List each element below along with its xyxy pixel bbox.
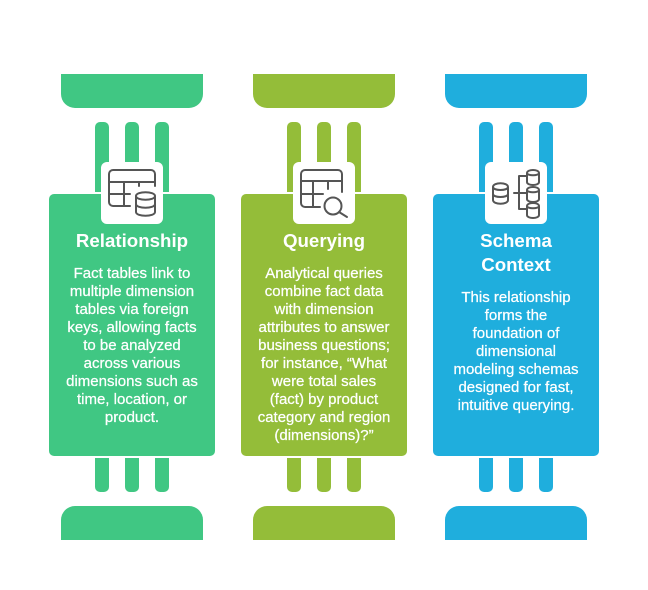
icon: table with magnifier <box>293 162 355 224</box>
icon: database schema tree <box>485 162 547 224</box>
top connector bar 1 <box>479 122 493 192</box>
top connector bar 2 <box>317 122 331 192</box>
bottom connector bar 1 <box>479 458 493 492</box>
heading: Schema Context: Schema <box>480 230 552 251</box>
panel: Relationship card <box>49 194 215 456</box>
bottom connector bar 1 <box>95 458 109 492</box>
text: Querying description: category and region <box>258 409 390 426</box>
text: Relationship description: dimensions such as <box>66 373 198 390</box>
text: Querying description: (dimensions)?” <box>274 427 374 444</box>
text: Querying description: for instance, “What <box>261 355 387 372</box>
text: Querying description: were total sales <box>272 373 376 390</box>
text: Relationship description: product. <box>105 409 159 426</box>
bottom connector bar 3 <box>347 458 361 492</box>
top connector bar 3 <box>155 122 169 192</box>
text: Schema Context description: forms the <box>485 307 547 324</box>
text: Querying description: (fact) by product <box>270 391 378 408</box>
text: Schema Context description: foundation of <box>473 325 559 342</box>
text: Schema Context description: This relationship <box>461 289 571 306</box>
text: Relationship description: time, location, or <box>77 391 187 408</box>
text: Querying description <box>258 265 390 444</box>
text: Relationship description <box>66 265 198 426</box>
top connector bar 3 <box>347 122 361 192</box>
text: Relationship description: tables via foreign <box>75 301 189 318</box>
top cap <box>253 74 395 108</box>
text: Relationship description: across various <box>84 355 180 372</box>
top cap <box>61 74 203 108</box>
heading: Schema Context: Context <box>481 254 551 275</box>
text: Relationship description: Fact tables link to <box>74 265 190 282</box>
bottom cap <box>253 506 395 540</box>
top connector bar 1 <box>95 122 109 192</box>
text: Querying description: Analytical queries <box>265 265 383 282</box>
column: Relationship <box>49 74 215 540</box>
bottom connector bar 2 <box>509 458 523 492</box>
text: Relationship description: multiple dimension <box>70 283 194 300</box>
top connector bar 3 <box>539 122 553 192</box>
bottom connector bar 1 <box>287 458 301 492</box>
heading: Relationship: Relationship <box>76 230 188 251</box>
top cap <box>445 74 587 108</box>
column: Schema Context <box>433 74 599 540</box>
text: Relationship description: keys, allowing facts <box>67 319 197 336</box>
bottom cap <box>445 506 587 540</box>
heading: Querying: Querying <box>283 230 365 251</box>
column: Querying <box>241 74 407 540</box>
bottom connector bar 2 <box>125 458 139 492</box>
text: Relationship description: to be analyzed <box>83 337 181 354</box>
top connector bar 1 <box>287 122 301 192</box>
text: Schema Context description: designed for fast, <box>458 379 574 396</box>
text: Schema Context description: dimensional <box>476 343 556 360</box>
text: Schema Context description: intuitive querying. <box>458 397 574 414</box>
bottom connector bar 2 <box>317 458 331 492</box>
panel: Querying card <box>241 194 407 456</box>
text: Querying description: attributes to answer <box>259 319 389 336</box>
top connector bar 2 <box>509 122 523 192</box>
text: Querying description: with dimension <box>274 301 374 318</box>
heading: Schema Context <box>480 230 552 275</box>
bottom connector bar 3 <box>539 458 553 492</box>
text: Schema Context description: modeling schemas <box>453 361 579 378</box>
bottom cap <box>61 506 203 540</box>
text: Querying description: business questions; <box>258 337 390 354</box>
top connector bar 2 <box>125 122 139 192</box>
bottom connector bar 3 <box>155 458 169 492</box>
text: Schema Context description <box>453 289 579 414</box>
panel: Schema Context card <box>433 194 599 456</box>
text: Querying description: combine fact data <box>265 283 383 300</box>
icon: table with database <box>101 162 163 224</box>
